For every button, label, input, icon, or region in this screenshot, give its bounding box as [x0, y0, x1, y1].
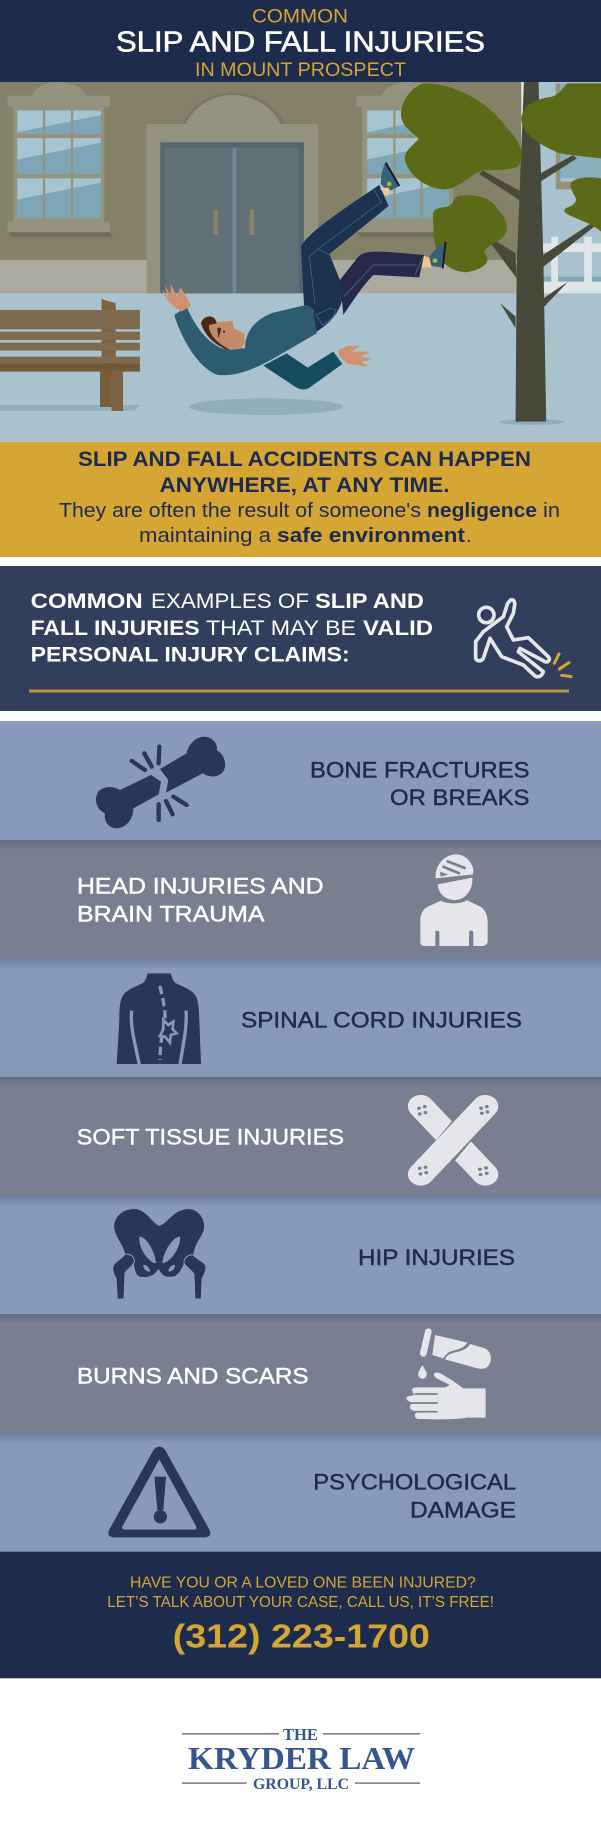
shoes — [381, 163, 444, 267]
logo: The Kryder Law Group: GROUP, LLC — [253, 1776, 349, 1793]
panel: hip injuries — [0, 1196, 601, 1314]
illustration: building, bench and tree — [0, 82, 601, 442]
label — [310, 758, 530, 810]
panel: bone fractures — [0, 721, 601, 840]
logo: The Kryder Law Group — [182, 1725, 420, 1793]
panel: call to action footer — [0, 1552, 601, 1678]
icon: falling person — [476, 600, 571, 677]
intro text: PERSONAL INJURY CLAIMS: — [31, 644, 350, 667]
far arm — [263, 352, 342, 390]
statement body: They are often the result of someone's — [59, 500, 421, 522]
left window — [8, 82, 113, 237]
statement body: negligence — [427, 500, 537, 522]
foliage — [401, 83, 601, 272]
panel: soft tissue — [0, 1077, 601, 1196]
door with surround — [146, 93, 318, 293]
label: SPINAL CORD INJURIES — [241, 1008, 522, 1033]
logo: The Kryder Law Group: KRYDER LAW — [188, 1740, 415, 1776]
label: SOFT TISSUE INJURIES — [77, 1125, 344, 1150]
far leg — [340, 252, 424, 315]
header banner — [0, 0, 601, 82]
intro text: VALID — [363, 617, 433, 640]
label: OR BREAKS — [390, 785, 530, 810]
label — [313, 1469, 516, 1522]
distant building and fence — [539, 83, 601, 293]
statement heading: SLIP AND FALL ACCIDENTS CAN HAPPEN — [78, 448, 531, 471]
heading: common: COMMON — [252, 7, 348, 28]
gold rule — [29, 690, 569, 692]
intro text: THAT MAY BE — [206, 617, 356, 640]
statement body: maintaining a — [139, 525, 272, 547]
panel: burns and scars — [0, 1314, 601, 1433]
statement body: . — [466, 525, 472, 547]
icon: warning triangle — [108, 1447, 210, 1537]
label: HIP INJURIES — [358, 1245, 515, 1270]
statement body: safe environment — [277, 525, 465, 547]
label: BONE FRACTURES — [310, 758, 530, 783]
statement heading — [78, 448, 531, 497]
icon: crossed bandages — [417, 1105, 489, 1176]
icon: broken bone — [96, 737, 225, 828]
label: BURNS AND SCARS — [77, 1364, 309, 1389]
panel: gold statement — [0, 442, 601, 557]
right window — [356, 82, 460, 237]
statement body: in — [543, 500, 560, 522]
label — [77, 874, 324, 927]
bench — [0, 299, 140, 411]
icon: spine injury — [117, 973, 201, 1065]
call to action text — [107, 1575, 494, 1611]
logo: The Kryder Law Group: THE — [283, 1725, 318, 1744]
illustration: falling man — [163, 163, 446, 415]
icon: bandaged head — [420, 854, 488, 946]
heading: location: IN MOUNT PROSPECT — [195, 60, 406, 81]
call to action text: LET’S TALK ABOUT YOUR CASE, CALL US, IT’S FREE! — [107, 1594, 494, 1611]
intro text: EXAMPLES OF — [151, 590, 309, 613]
call to action text: HAVE YOU OR A LOVED ONE BEEN INJURED? — [130, 1575, 476, 1592]
intro text: SLIP AND — [315, 590, 424, 613]
title: SLIP AND FALL INJURIES — [116, 27, 485, 59]
near leg — [301, 185, 389, 333]
tree — [401, 82, 601, 425]
phone number: (312) 223-1700 — [173, 1618, 430, 1655]
sweater — [174, 305, 317, 375]
statement body — [59, 500, 560, 547]
panel: head injuries — [0, 840, 601, 958]
panel: common examples heading — [0, 566, 601, 711]
intro text: FALL INJURIES — [31, 617, 200, 640]
label: BRAIN TRAUMA — [77, 902, 264, 927]
panel: spinal cord — [0, 958, 601, 1077]
label: PSYCHOLOGICAL — [313, 1469, 516, 1494]
label: HEAD INJURIES AND — [77, 874, 324, 899]
intro text: COMMON — [31, 590, 143, 613]
building wall — [0, 82, 521, 260]
icon: chemical burn on hand — [406, 1332, 491, 1419]
label: DAMAGE — [410, 1497, 516, 1522]
statement heading: ANYWHERE, AT ANY TIME. — [160, 474, 450, 497]
intro text — [31, 590, 433, 667]
head — [208, 321, 245, 350]
icon: pelvis — [113, 1209, 206, 1299]
panel: psychological damage — [0, 1433, 601, 1552]
hands — [163, 283, 373, 367]
